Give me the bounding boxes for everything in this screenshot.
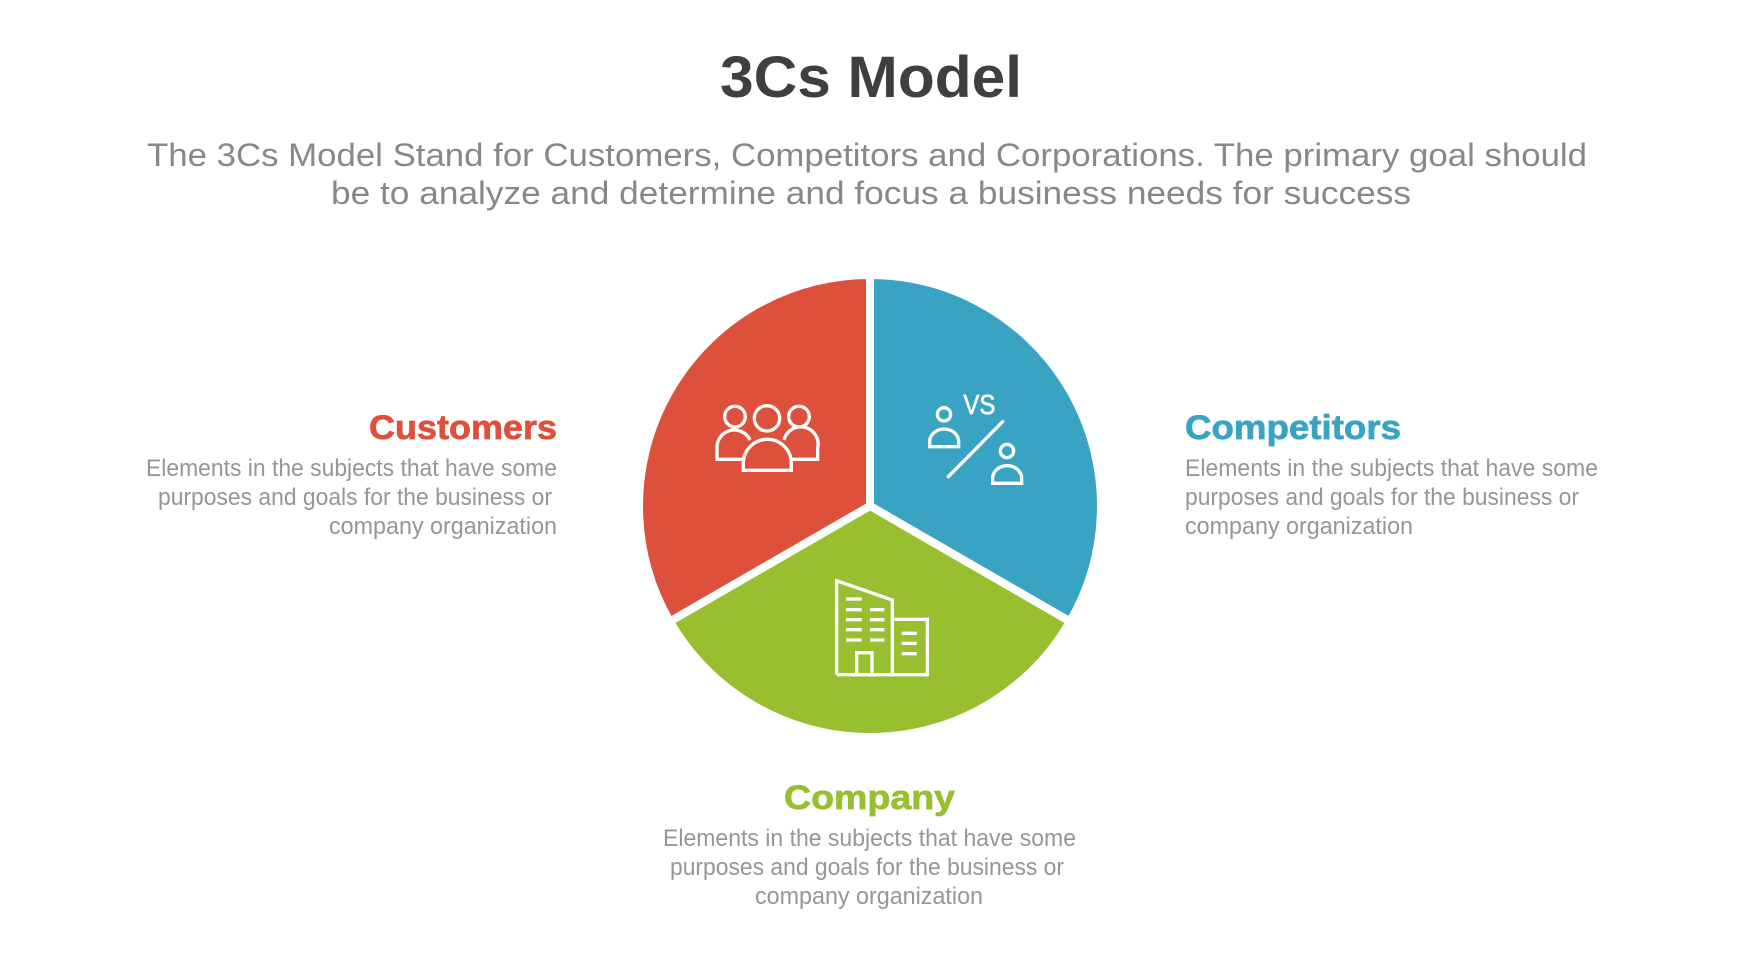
- segment: company: [670, 506, 1070, 737]
- panel: customers: [146, 409, 557, 540]
- description: company: company organization: [755, 883, 983, 910]
- description: competitors: Elements in the subjects that have some: [1185, 455, 1598, 482]
- icon: customers group of people: [717, 406, 818, 470]
- description: competitors: purposes and goals for the business or: [1185, 484, 1579, 511]
- heading: company: Company: [784, 779, 955, 817]
- title: 3Cs Model: [720, 45, 1022, 110]
- description: customers: company organization: [329, 513, 557, 540]
- description: company: Elements in the subjects that have some: [663, 825, 1076, 852]
- description: competitors: company organization: [1185, 513, 1413, 540]
- heading: competitors: Competitors: [1185, 409, 1401, 447]
- icon: competitors versus: [930, 389, 1022, 483]
- panel: competitors: [1185, 409, 1598, 540]
- subtitle text block: be to analyze and determine and focus a business needs for success: [331, 175, 1411, 211]
- heading: customers: Customers: [369, 409, 557, 447]
- segment: competitors: [870, 275, 1101, 622]
- subtitle text block: The 3Cs Model Stand for Customers, Competitors and Corporations. The primary goal should: [147, 137, 1587, 173]
- icon: competitors versus: VS: [963, 389, 995, 420]
- description: company: purposes and goals for the business or: [670, 854, 1064, 881]
- subtitle text block: [147, 137, 1587, 211]
- description: customers: [146, 455, 557, 540]
- segment: customers: [639, 275, 870, 622]
- description: customers: purposes and goals for the business or: [158, 484, 552, 511]
- description: customers: Elements in the subjects that have some: [146, 455, 557, 482]
- panel: company: [663, 779, 1076, 910]
- icon: company building: [837, 581, 927, 675]
- pie chart: [639, 275, 1101, 737]
- description: competitors: [1185, 455, 1598, 540]
- description: company: [663, 825, 1076, 910]
